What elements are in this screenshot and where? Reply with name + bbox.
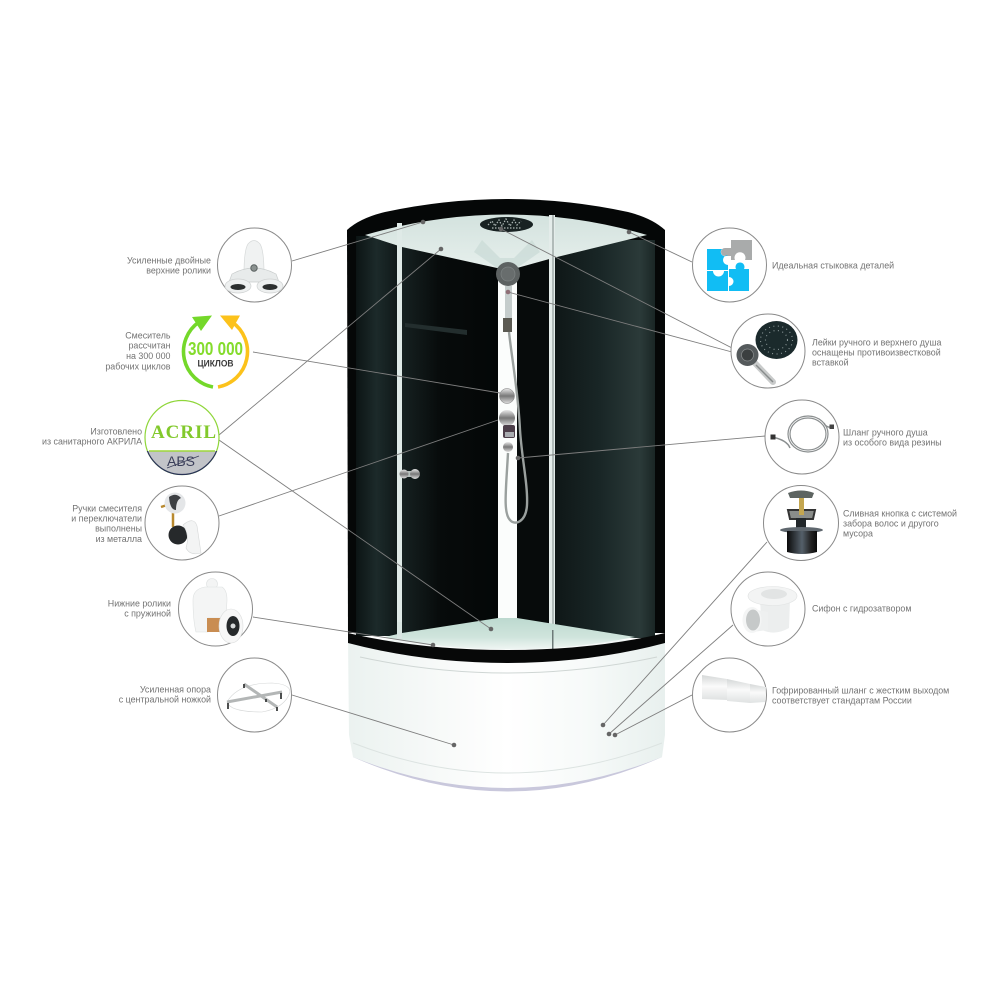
icon: green arrow (184, 316, 213, 387)
separator (149, 450, 215, 452)
panel: puzzle (692, 228, 894, 302)
tub lower contour (353, 743, 662, 773)
label: Шланг ручного душа (843, 428, 928, 438)
icon: tube (702, 675, 766, 703)
ACRIL word: ACRIL (151, 422, 216, 443)
door handle (400, 469, 420, 479)
acrylic tub front panel (348, 640, 665, 788)
circle (218, 228, 292, 302)
icon: siphon (742, 586, 797, 633)
label: рабочих циклов (105, 362, 171, 372)
switch knob (499, 410, 515, 438)
label: из особого вида резины (843, 438, 942, 448)
top shower head (480, 217, 533, 232)
panel: shower hose (765, 400, 942, 474)
circle top (145, 400, 219, 474)
label: Изготовлено (90, 426, 142, 436)
hose connector (503, 442, 513, 452)
icon: roller (193, 578, 243, 643)
label: Ручки смесителя (72, 504, 142, 514)
label: Усиленная опора (140, 684, 211, 694)
shower floor (385, 618, 635, 650)
ceiling shading (474, 240, 540, 268)
label: Нижние ролики (108, 598, 171, 608)
panel: lower rollers (108, 572, 252, 646)
circle (218, 658, 292, 732)
circle (764, 486, 838, 560)
hose (506, 332, 527, 523)
left glass panel (356, 236, 397, 636)
circle (145, 486, 219, 560)
label: из санитарного АКРИЛА (42, 436, 142, 446)
icon: hand shower (736, 344, 773, 382)
base black band (348, 633, 665, 663)
label: Сифон с гидрозатвором (812, 604, 911, 614)
ceiling (365, 214, 647, 268)
circle (731, 572, 805, 646)
door glass bottom rail (397, 622, 402, 640)
head (496, 262, 520, 286)
label: мусора (843, 528, 873, 538)
icon: handles (161, 492, 201, 554)
callout lines (219, 222, 767, 745)
panel: support frame (119, 658, 292, 732)
label: верхние ролики (146, 266, 211, 276)
circle (178, 572, 252, 646)
circle (765, 400, 839, 474)
label: вставкой (812, 358, 849, 368)
label: из металла (96, 534, 142, 544)
strike (167, 456, 199, 468)
panel: acrylic (42, 400, 219, 474)
ABS word: ABS (167, 453, 195, 469)
icon: overhead disc (756, 321, 798, 359)
callout dots (421, 220, 631, 747)
label: Лейки ручного и верхнего душа (812, 338, 941, 348)
icon: hose (771, 416, 834, 452)
back wall right (517, 258, 549, 628)
back wall left (402, 244, 498, 636)
label: с центральной ножкой (119, 694, 211, 704)
panel: corrugated hose (692, 658, 949, 732)
cabin black body (347, 199, 665, 633)
central column (498, 268, 517, 620)
label: Идеальная стыковка деталей (772, 260, 894, 270)
panel: siphon (731, 572, 911, 646)
label: выполнены (95, 524, 142, 534)
shelf (405, 323, 467, 335)
mixer knob (500, 388, 514, 404)
door strip left (397, 223, 402, 638)
icon: rollers (225, 240, 283, 293)
label: Гофрированный шланг с жестким выходом (772, 686, 949, 696)
tub upper contour (360, 657, 657, 673)
holder (503, 318, 512, 332)
icon: puzzle (707, 240, 752, 291)
circle (692, 228, 766, 302)
door right lower line (552, 630, 554, 650)
tub shadow (353, 752, 662, 792)
shower cabin (347, 199, 665, 792)
panel: 300 000 cycles (105, 316, 247, 387)
panel: drain button (764, 486, 957, 560)
circle (692, 658, 766, 732)
panel: mixer handles (71, 486, 219, 560)
handle (505, 286, 512, 318)
label: Усиленные двойные (127, 256, 211, 266)
number: 300 000 (188, 339, 243, 359)
label: соответствует стандартам России (772, 696, 912, 706)
unit: ЦИКЛОВ (198, 358, 234, 370)
label: забора волос и другого (843, 518, 939, 528)
label: Смеситель (125, 330, 171, 340)
door strip right (549, 215, 555, 647)
label: на 300 000 (126, 351, 171, 361)
label: с пружиной (124, 608, 171, 618)
circle (731, 314, 805, 388)
label: оснащены противоизвестковой (812, 348, 941, 358)
label: Сливная кнопка с системой (843, 508, 957, 518)
right glass panel (555, 240, 655, 638)
label: и переключатели (71, 514, 142, 524)
icon: yellow arrow (218, 316, 247, 387)
icon: support (227, 683, 290, 712)
panel: upper rollers (127, 228, 292, 302)
panel: shower heads (731, 314, 941, 388)
ABS segment (146, 451, 218, 476)
right strip dark line (552, 215, 554, 647)
icon: drain (780, 490, 823, 554)
hand shower (496, 262, 520, 332)
label: рассчитан (128, 340, 171, 350)
